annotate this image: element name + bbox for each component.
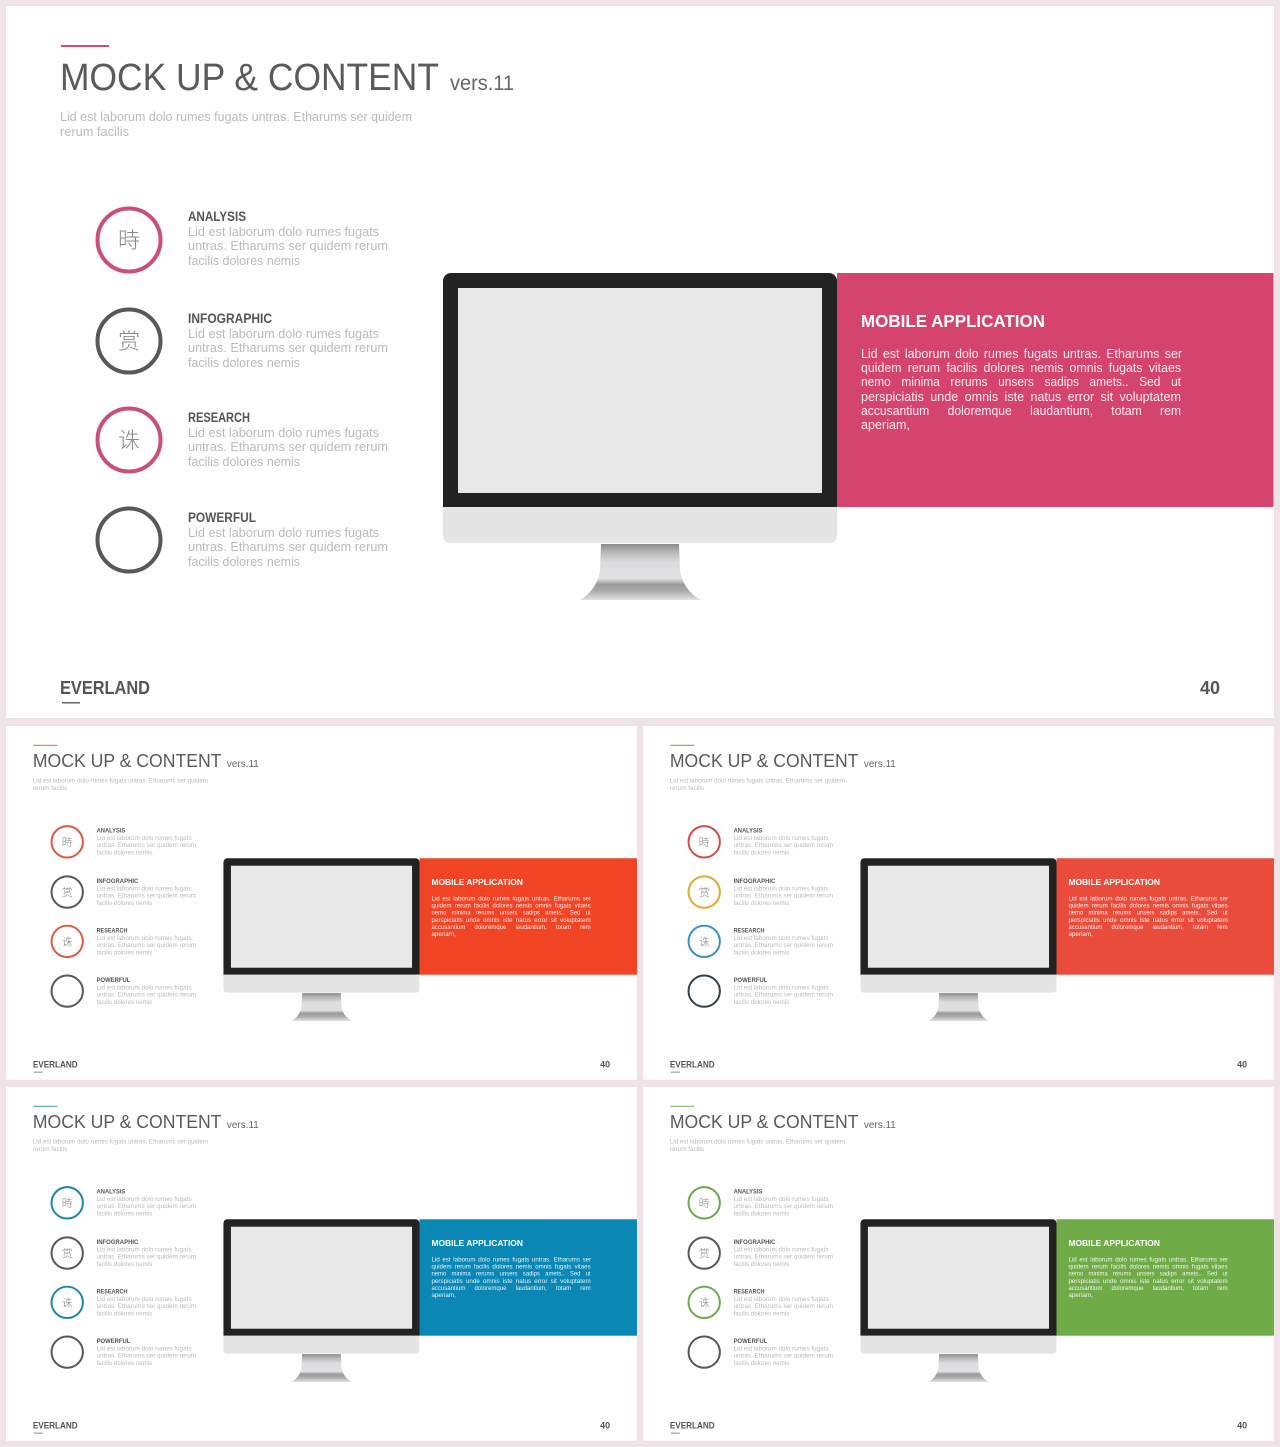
text block: infographic: untras. Etharums ser quidem rerum [97,893,196,900]
subtitle [670,1139,845,1153]
text block: powerful [734,1338,833,1367]
text block: infographic [97,878,196,907]
text block: infographic [97,1239,196,1268]
text block: powerful [734,977,833,1006]
text block: analysis: Lid est laborum dolo rumes fugats [97,835,192,842]
band paragraph: nemo minima rerums unsers sadips amets.. Sed ut [431,1270,591,1277]
text block: infographic: untras. Etharums ser quidem rerum [97,1254,196,1261]
icon: analysis circle: 時 [62,1195,73,1211]
subtitle: rerum facilis [60,124,129,139]
text block: research: untras. Etharums ser quidem rerum [97,1303,196,1310]
icon: analysis circle [689,1187,720,1219]
band heading: MOBILE APPLICATION [431,877,523,887]
text block: powerful: untras. Etharums ser quidem rerum [97,1353,196,1360]
text block: infographic: INFOGRAPHIC [734,1239,775,1246]
band paragraph: quidem rerum facilis dolores nemis omnis fugats vitaes [431,1264,591,1271]
text block: research: untras. Etharums ser quidem rerum [734,1303,833,1310]
text block: infographic: Lid est laborum dolo rumes fugats [734,1247,829,1254]
text block: infographic: facilis dolores nemis [97,900,152,907]
text block: analysis [734,827,833,856]
band paragraph: quidem rerum facilis dolores nemis omnis fugats vitaes [1068,1264,1228,1271]
subtitle [60,109,412,139]
band paragraph: aperiam, [431,1292,456,1299]
title: MOCK UP & CONTENT [670,1112,859,1133]
footer rule [34,1432,43,1434]
text block: analysis [97,827,196,856]
text block: powerful: facilis dolores nemis [188,554,300,569]
icon: powerful circle [52,975,83,1007]
accent line [33,1105,57,1108]
text block: powerful: facilis dolores nemis [97,1360,152,1367]
panel: main slide pink [6,6,1274,718]
text block: research: Lid est laborum dolo rumes fugats [188,425,379,440]
band paragraph: nemo minima rerums unsers sadips amets.. Sed ut [1068,909,1228,916]
text block: research: facilis dolores nemis [97,949,152,956]
icon: research circle [689,926,720,957]
text block: analysis: untras. Etharums ser quidem rerum [97,842,196,849]
text block: infographic: INFOGRAPHIC [97,1239,138,1246]
version label: vers.11 [227,1120,259,1131]
text block: analysis: untras. Etharums ser quidem rerum [734,842,833,849]
text block: analysis: facilis dolores nemis [97,849,152,856]
text block: research: facilis dolores nemis [188,454,300,469]
text block: analysis: facilis dolores nemis [188,253,300,268]
text block: powerful: POWERFUL [97,977,130,984]
panel: small slide red multicolour [643,726,1274,1080]
band paragraph: Lid est laborum dolo rumes fugats untras. Etharums ser [1068,896,1229,903]
text block: infographic: untras. Etharums ser quidem rerum [188,340,388,355]
text block: research [734,1288,833,1317]
title: MOCK UP & CONTENT [33,751,222,772]
band paragraph [431,896,592,938]
text block: analysis: untras. Etharums ser quidem rerum [188,238,388,253]
band paragraph: nemo minima rerums unsers sadips amets.. Sed ut [1068,1270,1228,1277]
version label: vers.11 [450,72,514,95]
icon: infographic circle: 赏 [118,324,140,356]
text block: powerful [97,977,196,1006]
subtitle: Lid est laborum dolo rumes fugats untras. Etharums ser quidem [670,1139,845,1146]
band paragraph: Lid est laborum dolo rumes fugats untras. Etharums ser [1068,1257,1229,1264]
band heading: MOBILE APPLICATION [861,311,1045,331]
text block: powerful: facilis dolores nemis [734,1360,789,1367]
text block: powerful: Lid est laborum dolo rumes fugats [97,1346,192,1353]
text block: powerful: POWERFUL [188,510,256,525]
text block: analysis: Lid est laborum dolo rumes fugats [734,1196,829,1203]
version label: vers.11 [864,759,896,770]
band paragraph: accusantium doloremque laudantium, totam rem [431,1285,591,1292]
footer brand: EVERLAND [33,1060,78,1070]
footer rule [34,1071,43,1073]
text block: analysis [188,209,388,268]
band heading: MOBILE APPLICATION [1068,877,1160,887]
text block: infographic: Lid est laborum dolo rumes fugats [188,326,379,341]
text block: research: untras. Etharums ser quidem rerum [97,942,196,949]
icon: analysis circle: 時 [699,834,710,850]
footer brand: EVERLAND [670,1421,715,1431]
subtitle: rerum facilis [33,785,67,792]
text block: analysis: untras. Etharums ser quidem rerum [734,1203,833,1210]
text block: analysis: ANALYSIS [734,1188,763,1195]
icon: infographic circle: 赏 [62,884,73,900]
band paragraph: accusantium doloremque laudantium, totam rem [1068,1285,1228,1292]
footer brand: EVERLAND [33,1421,78,1431]
accent line [670,744,694,747]
panel: small slide green [643,1087,1274,1441]
icon: research circle [98,408,160,472]
text block: analysis: facilis dolores nemis [97,1210,152,1217]
text block: research: untras. Etharums ser quidem rerum [734,942,833,949]
band paragraph: accusantium doloremque laudantium, totam rem [861,403,1181,418]
icon: analysis circle [52,1187,83,1219]
text block: infographic: facilis dolores nemis [734,900,789,907]
text block: infographic: INFOGRAPHIC [188,311,272,326]
icon: infographic circle [98,310,160,372]
icon: infographic circle [689,876,720,908]
icon: research circle: 诛 [699,933,710,949]
icon: powerful circle [52,1336,83,1368]
accent line [670,1105,694,1108]
footer rule [671,1432,680,1434]
text block: research: facilis dolores nemis [734,1310,789,1317]
text block: powerful: POWERFUL [734,1338,767,1345]
text block: research: RESEARCH [734,927,765,934]
text block: analysis: ANALYSIS [97,827,126,834]
band paragraph: quidem rerum facilis dolores nemis omnis fugats vitaes [861,360,1181,375]
version label: vers.11 [227,759,259,770]
icon: research circle: 诛 [699,1294,710,1310]
text block: powerful: untras. Etharums ser quidem rerum [188,539,388,554]
page number: 40 [600,1060,610,1070]
text block: research [734,927,833,956]
text block: powerful: facilis dolores nemis [734,999,789,1006]
text block: research [97,1288,196,1317]
text block: infographic: INFOGRAPHIC [734,878,775,885]
band paragraph: perspiciatis unde omnis iste natus error sit voluptatem [1068,917,1228,924]
text block: research: Lid est laborum dolo rumes fugats [734,935,829,942]
text block: analysis: Lid est laborum dolo rumes fugats [188,224,379,239]
icon: infographic circle: 赏 [699,884,710,900]
text block: analysis: ANALYSIS [97,1188,126,1195]
band paragraph [431,1257,592,1299]
monitor mockup [223,1219,420,1382]
text block: research: untras. Etharums ser quidem rerum [188,439,388,454]
footer rule [62,702,80,704]
monitor mockup [860,1219,1057,1382]
subtitle: Lid est laborum dolo rumes fugats untras. Etharums ser quidem [33,1139,208,1146]
text block: infographic: Lid est laborum dolo rumes fugats [97,1247,192,1254]
page number: 40 [1237,1060,1247,1070]
page number: 40 [1200,678,1220,698]
subtitle: rerum facilis [670,1146,704,1153]
band paragraph: aperiam, [431,931,456,938]
text block: research: Lid est laborum dolo rumes fugats [97,935,192,942]
band paragraph: perspiciatis unde omnis iste natus error sit voluptatem [861,389,1181,404]
title: MOCK UP & CONTENT [670,751,859,772]
accent line [33,744,57,747]
band paragraph: perspiciatis unde omnis iste natus error sit voluptatem [431,917,591,924]
band paragraph: nemo minima rerums unsers sadips amets.. Sed ut [431,909,591,916]
icon: infographic circle: 赏 [62,1245,73,1261]
icon: analysis circle [52,826,83,858]
text block: infographic: Lid est laborum dolo rumes fugats [97,886,192,893]
text block: powerful: untras. Etharums ser quidem rerum [97,992,196,999]
text block: research: Lid est laborum dolo rumes fugats [97,1296,192,1303]
text block: powerful: untras. Etharums ser quidem rerum [734,992,833,999]
band paragraph: aperiam, [1068,931,1093,938]
band paragraph [1068,1257,1229,1299]
text block: research: RESEARCH [97,1288,128,1295]
subtitle [33,778,208,792]
icon: infographic circle [52,876,83,908]
text block: analysis: facilis dolores nemis [734,849,789,856]
footer brand: EVERLAND [670,1060,715,1070]
icon: research circle: 诛 [118,423,140,455]
text block: infographic: facilis dolores nemis [734,1261,789,1268]
subtitle: rerum facilis [670,785,704,792]
band paragraph: aperiam, [861,417,910,432]
text block: powerful: facilis dolores nemis [97,999,152,1006]
text block: powerful: POWERFUL [734,977,767,984]
band heading: MOBILE APPLICATION [431,1238,523,1248]
accent line [61,45,109,47]
band paragraph: accusantium doloremque laudantium, totam rem [431,924,591,931]
text block: infographic [734,878,833,907]
text block: powerful: untras. Etharums ser quidem rerum [734,1353,833,1360]
subtitle: rerum facilis [33,1146,67,1153]
band heading: MOBILE APPLICATION [1068,1238,1160,1248]
text block: powerful [188,510,388,569]
text block: research: facilis dolores nemis [734,949,789,956]
version label: vers.11 [864,1120,896,1131]
band paragraph: accusantium doloremque laudantium, totam rem [1068,924,1228,931]
text block: research: RESEARCH [188,410,250,425]
subtitle: Lid est laborum dolo rumes fugats untras. Etharums ser quidem [670,778,845,785]
text block: powerful: Lid est laborum dolo rumes fugats [734,985,829,992]
text block: powerful [97,1338,196,1367]
text block: infographic: facilis dolores nemis [188,355,300,370]
footer rule [671,1071,680,1073]
monitor mockup [443,273,837,600]
band paragraph [1068,896,1229,938]
text block: analysis: Lid est laborum dolo rumes fugats [734,835,829,842]
band paragraph: Lid est laborum dolo rumes fugats untras. Etharums ser [861,346,1183,361]
text block: infographic [734,1239,833,1268]
band paragraph [861,346,1183,432]
text block: analysis [97,1188,196,1217]
text block: infographic: untras. Etharums ser quidem rerum [734,893,833,900]
page number: 40 [600,1421,610,1431]
icon: analysis circle: 時 [62,834,73,850]
page number: 40 [1237,1421,1247,1431]
text block: powerful: Lid est laborum dolo rumes fugats [97,985,192,992]
title: MOCK UP & CONTENT [33,1112,222,1133]
text block: research: RESEARCH [97,927,128,934]
text block: research [188,410,388,469]
text block: analysis [734,1188,833,1217]
text block: infographic: INFOGRAPHIC [97,878,138,885]
icon: infographic circle: 赏 [699,1245,710,1261]
text block: infographic: facilis dolores nemis [97,1261,152,1268]
subtitle: Lid est laborum dolo rumes fugats untras. Etharums ser quidem [33,778,208,785]
colour band [420,1219,637,1336]
colour band [837,273,1274,507]
text block: infographic: untras. Etharums ser quidem rerum [734,1254,833,1261]
icon: research circle [52,926,83,957]
panel: small slide orange [6,726,637,1080]
icon: powerful circle [689,1336,720,1368]
monitor mockup [223,858,420,1021]
text block: research: RESEARCH [734,1288,765,1295]
icon: research circle [52,1287,83,1318]
panel: small slide blue [6,1087,637,1441]
text block: powerful: POWERFUL [97,1338,130,1345]
band paragraph: Lid est laborum dolo rumes fugats untras. Etharums ser [431,1257,592,1264]
band paragraph: Lid est laborum dolo rumes fugats untras. Etharums ser [431,896,592,903]
icon: research circle: 诛 [62,933,73,949]
text block: research [97,927,196,956]
icon: research circle [689,1287,720,1318]
text block: powerful: Lid est laborum dolo rumes fugats [188,525,379,540]
text block: infographic: Lid est laborum dolo rumes fugats [734,886,829,893]
text block: analysis: Lid est laborum dolo rumes fugats [97,1196,192,1203]
colour band [1057,858,1274,975]
band paragraph: perspiciatis unde omnis iste natus error sit voluptatem [1068,1278,1228,1285]
subtitle [670,778,845,792]
band paragraph: quidem rerum facilis dolores nemis omnis fugats vitaes [1068,903,1228,910]
icon: analysis circle [98,208,160,272]
colour band [420,858,637,975]
band paragraph: aperiam, [1068,1292,1093,1299]
subtitle: Lid est laborum dolo rumes fugats untras. Etharums ser quidem [60,109,412,124]
band paragraph: quidem rerum facilis dolores nemis omnis fugats vitaes [431,903,591,910]
band paragraph: perspiciatis unde omnis iste natus error sit voluptatem [431,1278,591,1285]
band paragraph: nemo minima rerums unsers sadips amets.. Sed ut [861,374,1181,389]
text block: analysis: facilis dolores nemis [734,1210,789,1217]
text block: analysis: ANALYSIS [188,209,246,224]
subtitle [33,1139,208,1153]
icon: research circle: 诛 [62,1294,73,1310]
text block: analysis: untras. Etharums ser quidem rerum [97,1203,196,1210]
text block: analysis: ANALYSIS [734,827,763,834]
icon: powerful circle [689,975,720,1007]
icon: infographic circle [52,1237,83,1269]
icon: powerful circle [98,508,160,572]
text block: powerful: Lid est laborum dolo rumes fugats [734,1346,829,1353]
text block: research: Lid est laborum dolo rumes fugats [734,1296,829,1303]
colour band [1057,1219,1274,1336]
icon: analysis circle: 時 [699,1195,710,1211]
title: MOCK UP & CONTENT [60,57,439,99]
icon: infographic circle [689,1237,720,1269]
footer brand: EVERLAND [60,678,150,698]
text block: infographic [188,311,388,370]
icon: analysis circle [689,826,720,858]
monitor mockup [860,858,1057,1021]
text block: research: facilis dolores nemis [97,1310,152,1317]
icon: analysis circle: 時 [118,223,140,255]
